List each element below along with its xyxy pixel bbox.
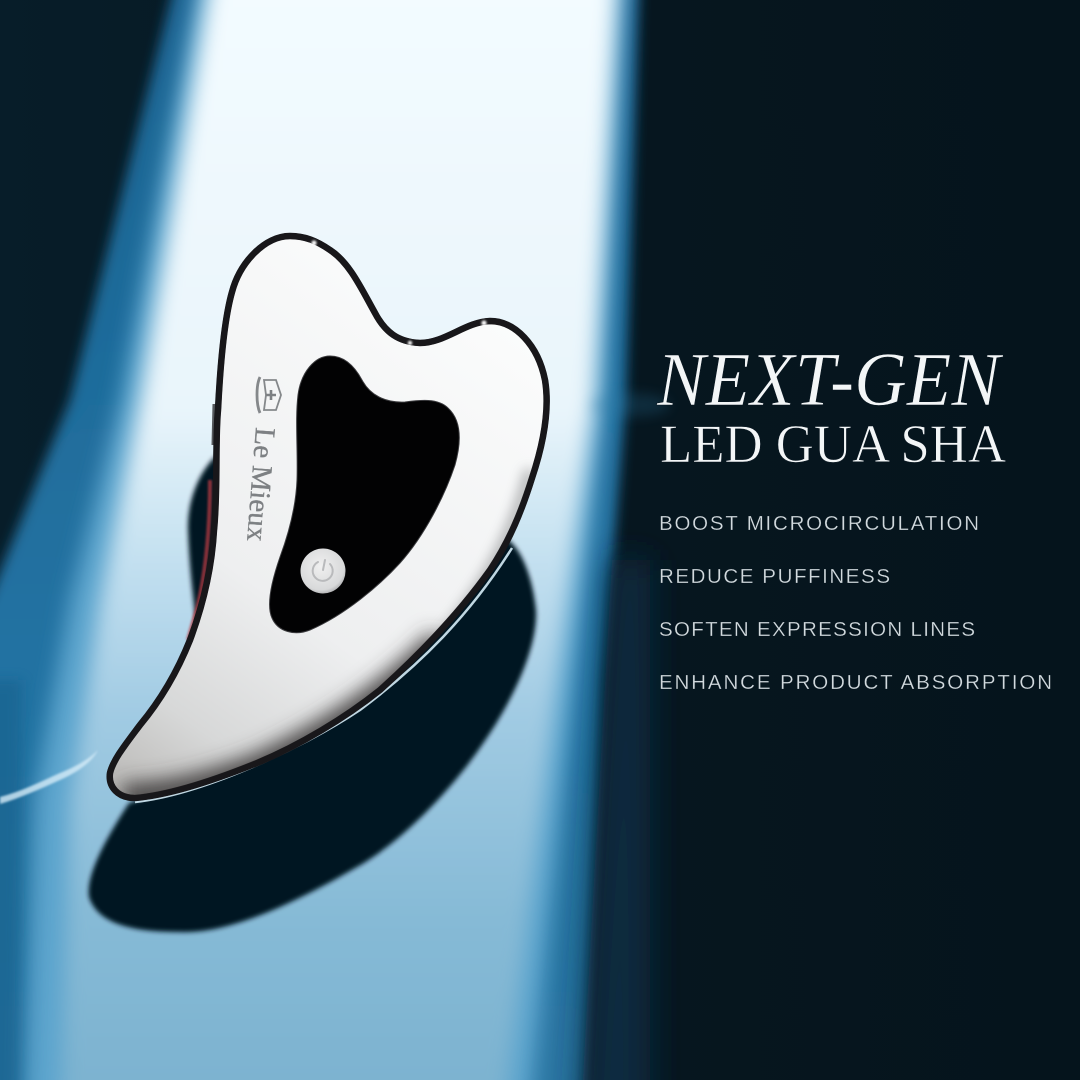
benefits list bbox=[659, 512, 1052, 694]
benefit 1: BOOST MICROCIRCULATION bbox=[659, 512, 979, 535]
device underside rim bbox=[135, 548, 512, 802]
light beam bbox=[0, 0, 650, 1080]
device body bbox=[110, 236, 547, 798]
left stripe bbox=[0, 680, 22, 1080]
headline bbox=[656, 338, 1006, 474]
button cap bbox=[300, 548, 346, 594]
power icon bbox=[313, 560, 333, 581]
headline line 2: LED GUA SHA bbox=[660, 414, 1006, 474]
beam core bbox=[60, 0, 618, 1080]
crest laurels bbox=[257, 377, 260, 413]
light streak bbox=[0, 750, 98, 804]
glow right of product bbox=[590, 393, 670, 417]
benefit 3: SOFTEN EXPRESSION LINES bbox=[659, 618, 975, 641]
lower right falloff bbox=[580, 560, 650, 1080]
benefit 4: ENHANCE PRODUCT ABSORPTION bbox=[659, 671, 1052, 694]
beam halo bbox=[0, 0, 640, 1080]
crest cross bbox=[266, 390, 276, 400]
dark panel bbox=[270, 356, 459, 633]
beam mid tone bbox=[25, 0, 625, 1080]
red LED glow bbox=[188, 480, 210, 640]
product: gua sha device bbox=[110, 236, 547, 802]
headline line 1: NEXT-GEN bbox=[656, 338, 1004, 422]
cast shadow bbox=[89, 455, 536, 932]
logo wordmark: Le Mieux bbox=[240, 426, 281, 543]
side nub bbox=[214, 404, 215, 445]
crest shield bbox=[264, 380, 281, 410]
power button bbox=[300, 548, 346, 594]
edge sparkles bbox=[311, 240, 487, 345]
benefit 2: REDUCE PUFFINESS bbox=[659, 565, 890, 588]
logo crest bbox=[257, 377, 281, 413]
lower edge shading bbox=[122, 470, 530, 796]
body inner edge bbox=[110, 236, 547, 798]
